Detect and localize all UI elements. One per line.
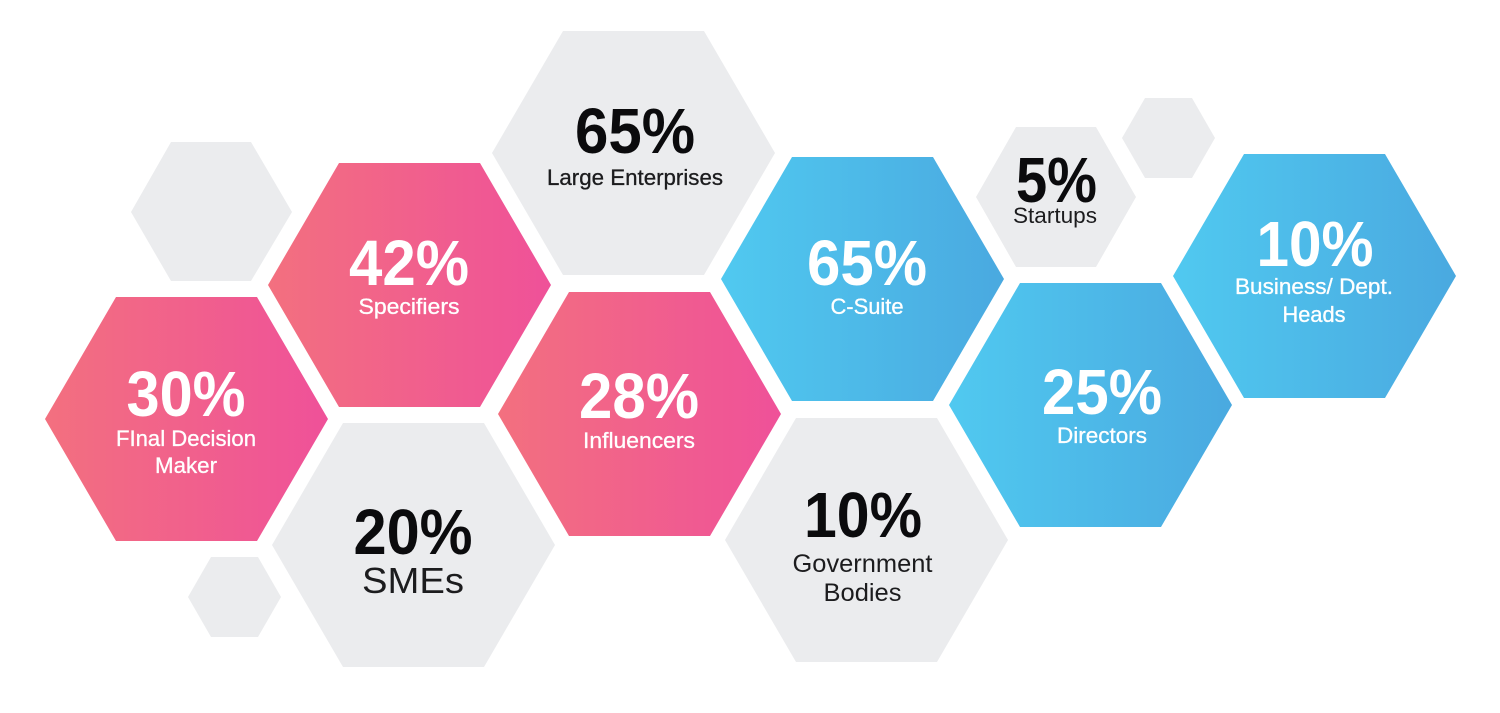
hexagon: C-Suite 65%: C-Suite [830, 294, 904, 319]
hexagon: Startups 5%: Startups [1013, 203, 1097, 228]
hexagon: Business/Dept. Heads 10% [1173, 154, 1456, 398]
hexagon: Government Bodies 10%: 10% [804, 479, 922, 551]
hexagon: C-Suite 65% [721, 157, 1004, 401]
hexagon: Specifiers 42%: 42% [349, 227, 469, 299]
hexagon: Directors 25%: 25% [1042, 356, 1162, 428]
small decorative hexagon top right [1122, 98, 1215, 178]
hexagon: Influencers 28% [498, 292, 781, 536]
hexagon: Government Bodies 10%: Bodies [824, 579, 902, 607]
hexagon: C-Suite 65%: 65% [807, 227, 927, 299]
hexagon: Business/Dept. Heads 10%: 10% [1256, 208, 1374, 280]
hexagon: Final Decision Maker 30%: Maker [155, 453, 217, 478]
hexagon: Business/Dept. Heads 10%: Heads [1282, 302, 1346, 327]
hexagon: Specifiers 42% [268, 163, 551, 407]
hexagon: SMEs 20% [272, 423, 555, 667]
hexagon: Directors 25% [949, 283, 1232, 527]
hexagon: Government Bodies 10%: Government [792, 550, 933, 578]
small decorative hexagon left [131, 142, 292, 281]
hexagon: Large Enterprises 65% [492, 31, 775, 275]
hexagon: Directors 25%: Directors [1057, 423, 1147, 448]
hexagon: Specifiers 42%: Specifiers [358, 294, 460, 319]
hexagon: Final Decision Maker 30% [45, 297, 328, 541]
hexagon: SMEs 20%: 20% [354, 496, 472, 568]
hexagon: Final Decision Maker 30%: 30% [126, 358, 246, 430]
hexagon: Startups 5% [976, 127, 1136, 267]
small decorative hexagon bottom [188, 557, 281, 637]
hexagon: Influencers 28%: Influencers [583, 428, 695, 453]
hexagon: Business/Dept. Heads 10%: Business/ Dept. [1235, 274, 1393, 299]
hexagon: Startups 5%: 5% [1016, 144, 1097, 216]
hexagon: SMEs 20%: SMEs [362, 560, 464, 601]
hexagon: Influencers 28%: 28% [579, 360, 699, 432]
hexagon: Large Enterprises 65%: Large Enterprises [547, 165, 723, 190]
hexagon: Large Enterprises 65%: 65% [575, 95, 695, 167]
hexagon: Final Decision Maker 30%: FInal Decision [116, 426, 256, 451]
hexagon: Government Bodies 10% [725, 418, 1008, 662]
